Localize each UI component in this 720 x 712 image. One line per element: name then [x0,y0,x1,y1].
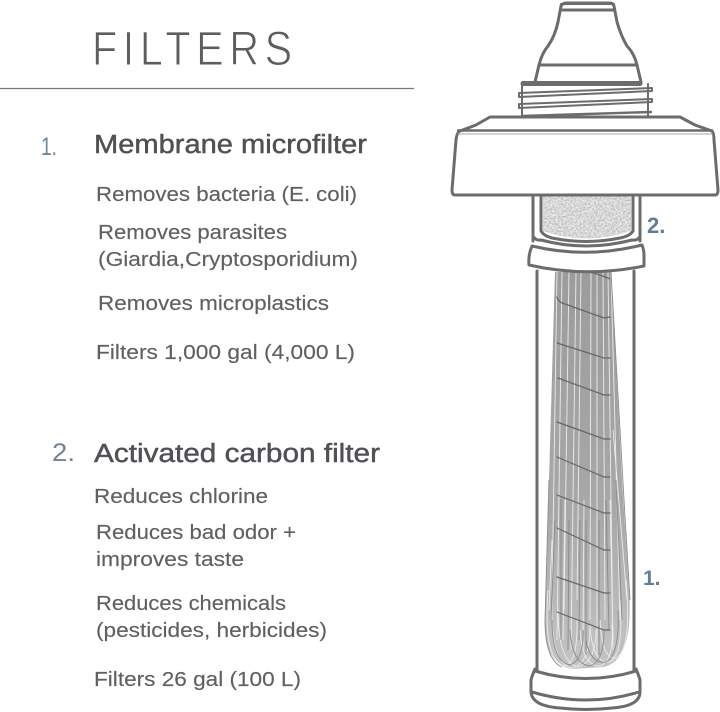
text: chemicals: (pesticides, herbicides) [96,620,327,642]
panel: membrane microfilter [41,131,368,364]
text: chemicals [96,593,327,642]
text: microplastics: Removes microplastics [98,293,329,315]
text: odor and taste: Reduces bad odor + [96,522,296,544]
text: capacity 1,000 gal: Filters 1,000 gal (4,000 L) [96,342,355,364]
text: parasites: (Giardia,Cryptosporidium) [98,249,358,271]
text: parasites: Removes parasites [98,222,287,244]
number 2: 2. [52,439,75,467]
title: FILTERS [92,22,298,76]
text: chlorine: Reduces chlorine [94,486,268,508]
fiber bundle [545,272,630,669]
text: bacteria: Removes bacteria (E. coli) [96,184,357,206]
number 1: 1. [41,133,57,161]
text: odor and taste: improves taste [96,549,244,571]
label 1: 1. [643,567,661,590]
lid [452,117,718,195]
illustration: filter [452,3,718,710]
heading: activated carbon filter: Activated carbon filter [94,440,381,468]
text: parasites [98,222,358,271]
text: chemicals: Reduces chemicals [96,593,286,615]
text: capacity 26 gal: Filters 26 gal (100 L) [94,669,301,691]
carbon filter [543,196,631,238]
heading: membrane microfilter: Membrane microfilter [94,131,368,159]
collar [529,245,644,272]
nozzle [535,3,641,82]
label 2: 2. [647,213,665,238]
text: odor and taste [96,522,296,571]
threads [519,84,652,117]
base [531,669,640,710]
fiber bands [557,272,610,630]
panel: activated carbon filter [52,439,381,691]
tube [533,195,640,670]
